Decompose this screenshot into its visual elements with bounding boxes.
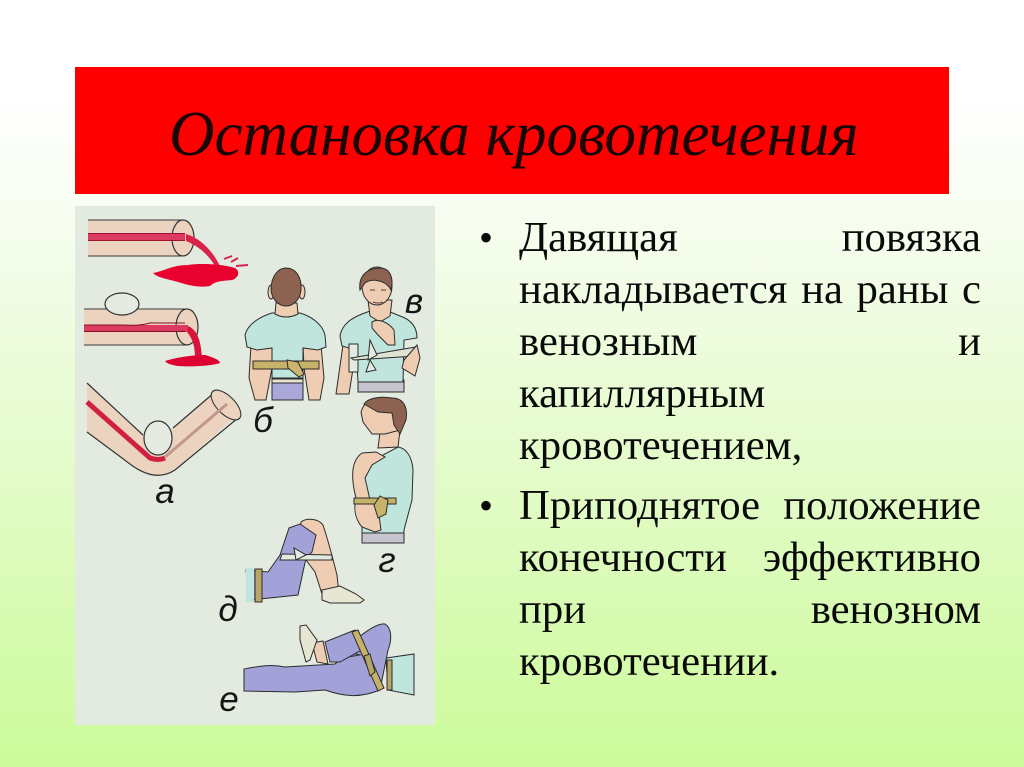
bullet list: накладывается на раны с [519,266,981,313]
figure: arm tourniquet, side view [353,397,413,543]
bullet list: • [479,215,493,260]
bullet list: конечности эффективно [519,534,981,581]
figure: belt on upper arms, back view [245,268,326,400]
label: a: а [155,472,175,511]
bullet list: Приподнятое положение [519,482,981,529]
tube with open bleeding [88,220,248,287]
bullet list [479,214,981,685]
figure: tourniquet on thigh, lying [244,624,414,696]
label: д: д [218,590,238,629]
label: е: е [219,680,239,719]
bullet list: Давящая повязка [519,214,981,261]
label: б: б [253,401,274,440]
bullet list: кровотечении. [519,638,779,685]
illustration panel: methods of stopping bleeding [75,206,435,725]
title: Остановка кровотечения [169,99,859,169]
bullet list: венозным и [519,318,981,365]
bent limb with pad [87,383,246,476]
label: г: г [378,541,396,580]
bullet list: кровотечением, [519,422,802,469]
figure: bandage on chest, front view [336,267,420,394]
bullet list: • [479,483,493,528]
label: в: в [405,282,423,321]
tube with pressure pad [84,293,220,366]
bullet list: при венозном [519,586,981,633]
figure: bandage on thigh [246,519,364,603]
bullet list: капиллярным [519,370,765,417]
title banner [75,67,949,194]
